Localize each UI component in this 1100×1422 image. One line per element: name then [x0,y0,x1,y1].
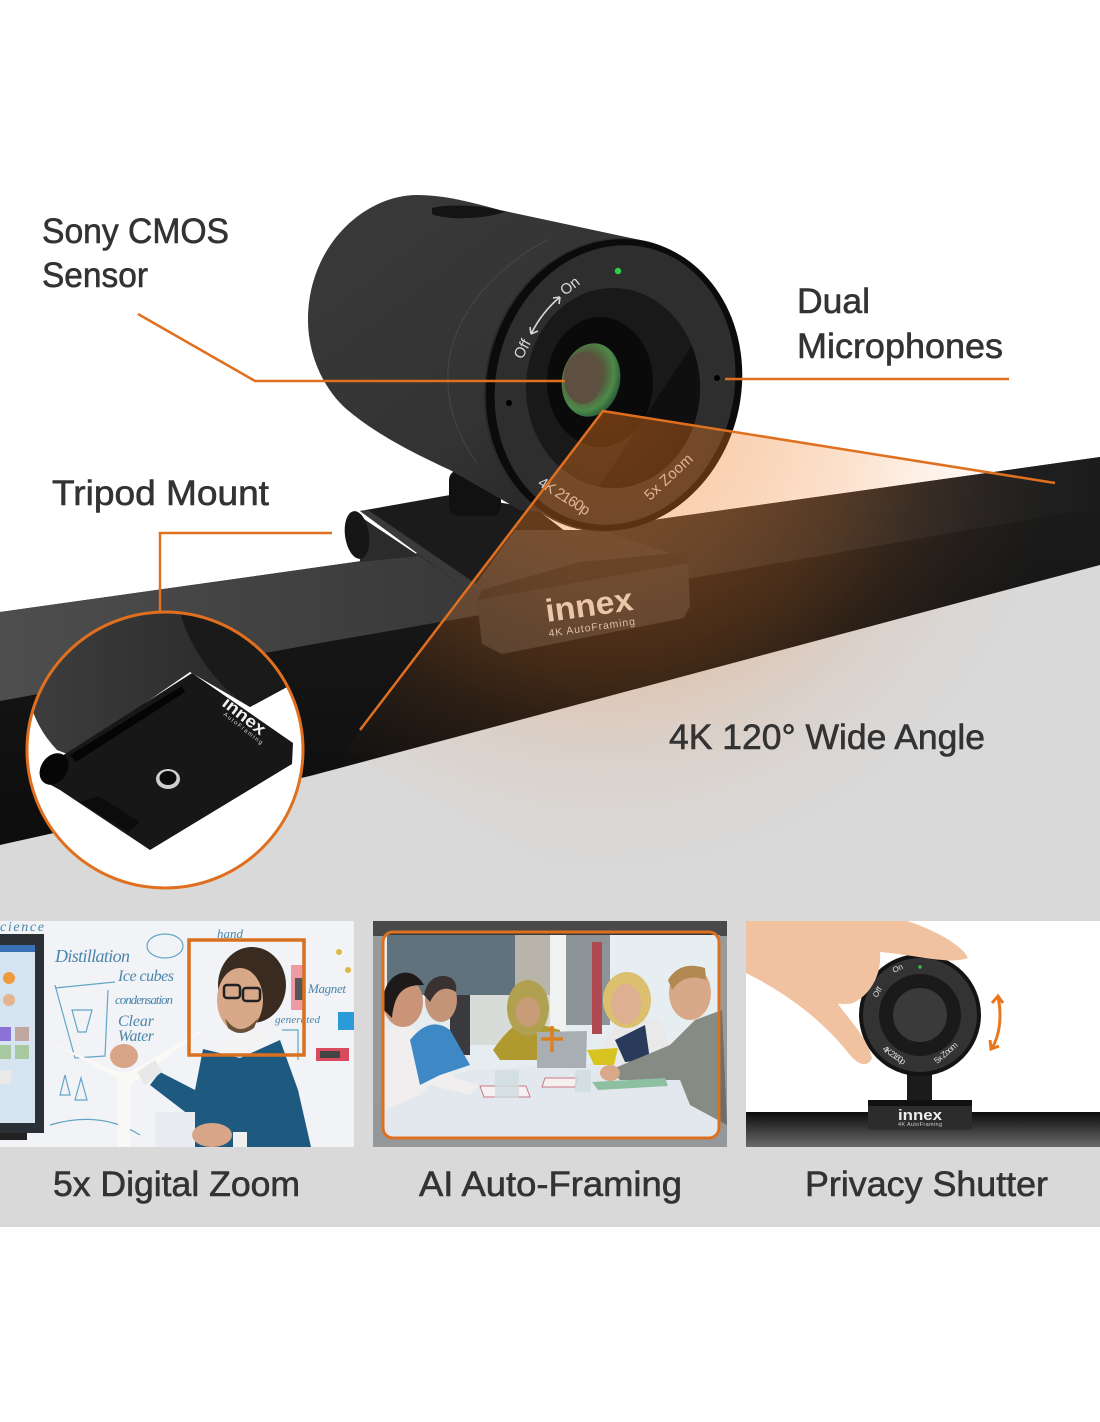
thumbnail: privacy shutter: 5x Zoom [932,1040,960,1066]
label: Privacy Shutter: Privacy Shutter [805,1165,1048,1204]
label: 5x Digital Zoom: 5x Digital Zoom [53,1165,300,1204]
label: Dual Microphones [797,282,1003,366]
webcam mount clamp [342,470,690,654]
thumbnail: privacy shutter: Off [871,985,884,999]
framing rectangle [383,932,719,1138]
webcam logo: 4K AutoFraming [548,616,636,640]
wide angle beam [345,411,1065,870]
paper turbine [45,1025,210,1147]
thumbnail: privacy shutter: 4K 2160p [881,1043,908,1067]
monitor bar [0,457,1100,845]
microphone holes [506,375,720,406]
camera stand [907,1074,932,1100]
whiteboard notes: Ice cubes [117,968,174,985]
callout line: tripod [160,533,332,611]
dim surround [373,921,727,1147]
presenter sweater [150,1040,311,1147]
label: Sony CMOS Sensor: Sensor [42,256,148,295]
whiteboard notes: hand [217,926,244,941]
tripod mount inset [20,612,310,888]
yellow bowl [587,1048,618,1065]
meeting table [373,1060,727,1147]
ring markings: 5x Zoom [641,451,697,504]
person one [385,1025,480,1110]
lens [555,338,627,422]
whiteboard sketch [50,934,298,1135]
notebook and papers [592,1078,668,1090]
callout line: microphones [725,378,1009,380]
whiteboard notes [0,920,346,1045]
beam edge lines [360,411,1055,730]
person four [600,1018,675,1085]
framing crosshair [541,1026,563,1052]
person two [410,1024,470,1085]
ring markings: Off [511,336,535,362]
label: Sony CMOS Sensor: Sony CMOS [42,212,229,251]
ring markings [511,273,697,519]
label: Sony CMOS Sensor [42,212,229,295]
display panel [0,934,44,1133]
ring markings: 4K 2160p [535,474,593,519]
camera face [859,954,981,1076]
person five [610,1010,727,1125]
label: Dual Microphones: Microphones [797,327,1003,366]
label: Tripod Mount: Tripod Mount [52,474,269,513]
whiteboard notes: cience [0,920,44,935]
thumbnail: privacy shutter: 4K AutoFraming [898,1122,942,1128]
thumbnail: digital zoom [0,920,354,1147]
whiteboard notes: generated [275,1014,320,1026]
thumbnail: privacy shutter: On [891,962,905,975]
ring markings: On [557,273,583,299]
webcam logo: innex [543,581,635,629]
whiteboard notes: Distillation [54,946,130,966]
thumbnail: auto framing [373,921,727,1147]
whiteboard notes: Water [118,1028,155,1045]
webcam body [308,195,742,532]
whiteboard notes: Clear [118,1013,155,1030]
monitor edge [746,1112,1100,1147]
office interior [373,921,727,936]
zoom frame [189,940,304,1055]
wall details [338,1012,354,1030]
stand logo: innex [898,1107,943,1124]
label: AI Auto-Framing: AI Auto-Framing [419,1165,682,1204]
whiteboard notes: condensation [115,992,173,1007]
presenter head [218,947,286,1023]
label: Dual Microphones: Dual [797,282,870,321]
hand [746,921,968,1064]
tripod mount inset: AutoFraming [222,712,263,746]
grey lower band [0,565,1100,1227]
status LED [615,268,621,274]
tripod mount inset: innex [219,693,270,739]
thumbnail: privacy shutter [746,921,1100,1147]
callout line: sensor [138,314,565,381]
label: 4K wide angle: 4K 120° Wide Angle [669,718,985,757]
person three [493,1026,560,1060]
laptop [537,1031,587,1068]
rotate arrow [990,996,1003,1049]
whiteboard notes: Magnet [307,981,346,996]
